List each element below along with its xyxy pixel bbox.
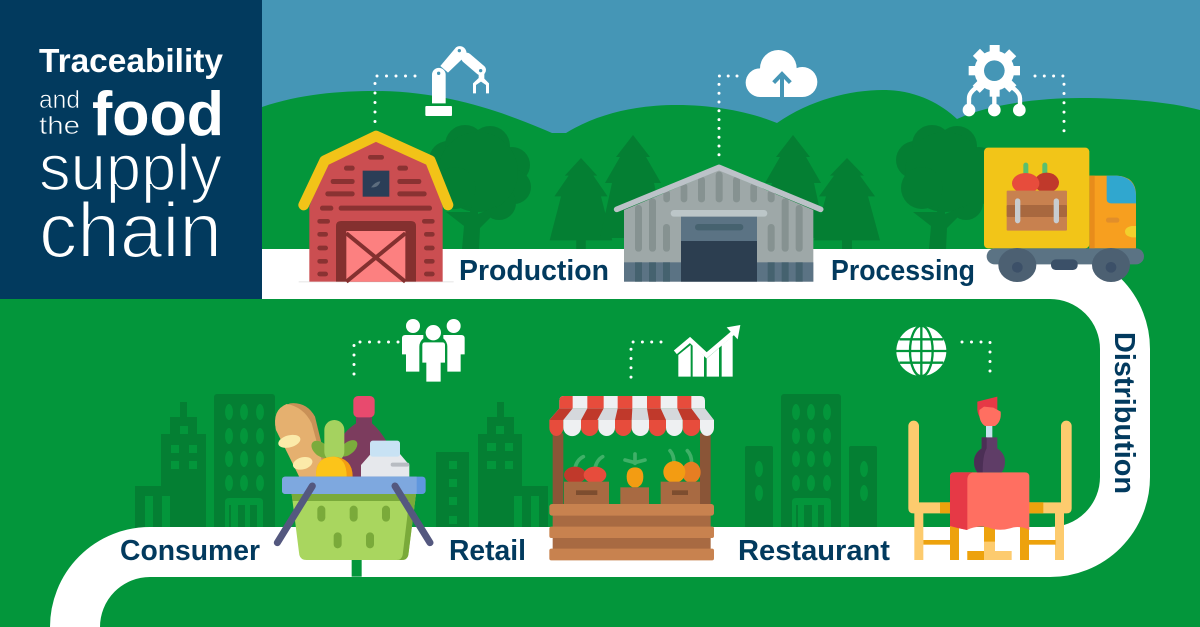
green ground [0,299,1200,627]
connector dots: consumer [354,342,398,380]
title: supply: supply [39,131,222,204]
tree: left oak [429,125,531,249]
sky background [0,0,1200,300]
title panel [0,0,262,299]
counter [553,513,711,550]
bread [275,403,330,478]
rolling hills [262,90,1200,310]
icon: robot arm [425,46,489,116]
title: the: the [39,112,80,140]
connector dots: retail [631,342,661,380]
pine 3 [760,135,826,249]
truck: distribution [984,148,1144,282]
icon: cloud upload [746,50,817,97]
milk bottle [361,454,409,477]
tablecloth [950,472,1029,530]
dining table: restaurant [908,397,1072,560]
connector dots: production [375,76,415,123]
wine bottle [340,417,387,478]
produce [575,451,692,468]
city skyline left [135,394,275,531]
title: chain: chain [39,186,222,274]
icon: people [402,319,465,382]
pine 4 [814,158,880,249]
icon: growth chart [675,325,740,377]
tree: right oak [896,125,998,249]
basket: consumer [275,396,430,577]
pine 2 [600,135,666,249]
title: Traceability: Traceability [39,42,224,79]
title: food: food [92,80,224,149]
basket rim [282,477,426,494]
city skyline right [745,394,877,531]
forest trees [429,125,998,249]
carrot [308,437,333,461]
label: Production: Production [459,255,609,287]
basket handles [277,486,430,543]
icon: globe [896,326,947,376]
warehouse: processing [617,167,821,282]
crates [564,482,609,504]
label: Restaurant: Restaurant [738,535,890,567]
label: Processing: Processing [831,255,975,287]
market stall: retail [549,396,714,560]
title: and: and [39,86,80,114]
white winding road [75,274,1125,627]
awning [559,396,705,408]
pine 1 [550,158,612,249]
label: Retail: Retail [449,535,526,567]
icon: gear network [963,45,1026,116]
connector dots: processing [719,76,737,155]
barn: production [299,136,454,282]
basket body [292,494,416,560]
vase and flower [986,423,992,438]
city skyline centre [436,402,548,531]
connector dots: distribution [1035,76,1064,138]
connector dots: restaurant [962,342,990,380]
label: Consumer: Consumer [120,535,260,567]
label: Distribution: Distribution [1108,332,1140,494]
